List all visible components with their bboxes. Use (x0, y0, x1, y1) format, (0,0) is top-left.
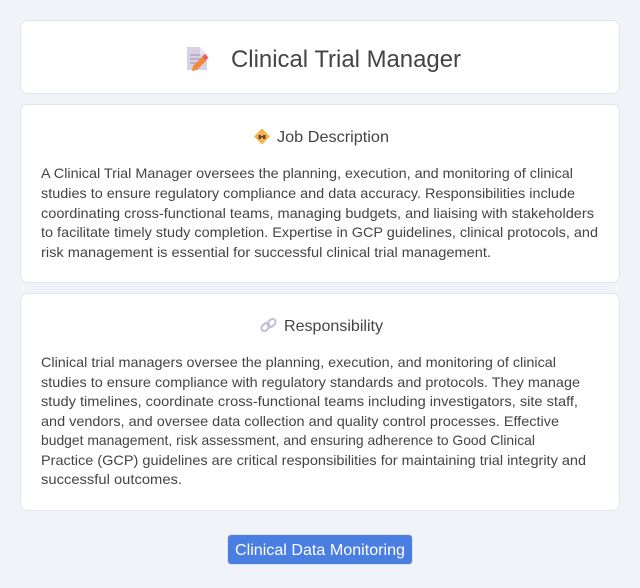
icon: orange diamond (254, 128, 270, 144)
text block: job description: to facilitate timely study completion. Expertise in GCP guidelines, clinical protocols, and (41, 224, 598, 240)
text block: responsibility: and vendors, and oversee data collection and quality control processes. Effective (41, 413, 559, 429)
text block: responsibility: budget management, risk assessment, and ensuring adherence to Good Clinical (41, 432, 535, 448)
text block: responsibility: Practice (GCP) guidelines are critical responsibilities for maintaining trial integrity and (41, 452, 586, 468)
button: clinical data monitoring: Clinical Data Monitoring (235, 542, 405, 559)
text block: job description: coordinating cross-functional teams, managing budgets, and liaising with stakeholders (41, 205, 594, 221)
heading: job description: Job Description (277, 129, 389, 146)
text block: responsibility: study timelines, coordinate cross-functional teams including investigators, site staff, (41, 393, 578, 409)
text block: responsibility: successful outcomes. (41, 471, 182, 487)
panel: title (20, 20, 620, 94)
text block: job description (41, 165, 598, 260)
button: clinical data monitoring (228, 535, 412, 564)
text block: responsibility: studies to ensure compliance with regulatory standards and protocols. They manage (41, 374, 580, 390)
text block: job description: A Clinical Trial Manager oversees the planning, execution, and monitoring of clinical (41, 165, 573, 181)
title: Clinical Trial Manager (231, 46, 461, 73)
panel: responsibility (20, 293, 620, 511)
text block: job description: studies to ensure regulatory compliance and data accuracy. Responsibilities include (41, 185, 575, 201)
icon: document with pencil (187, 47, 208, 71)
text block: responsibility: Clinical trial managers oversee the planning, execution, and monitoring of clinical (41, 354, 556, 370)
text block: job description: risk management is essential for successful clinical trial management. (41, 244, 491, 260)
panel: job description (20, 104, 620, 283)
icon: link (260, 318, 277, 332)
heading: responsibility: Responsibility (284, 318, 383, 335)
text block: responsibility (41, 354, 586, 487)
